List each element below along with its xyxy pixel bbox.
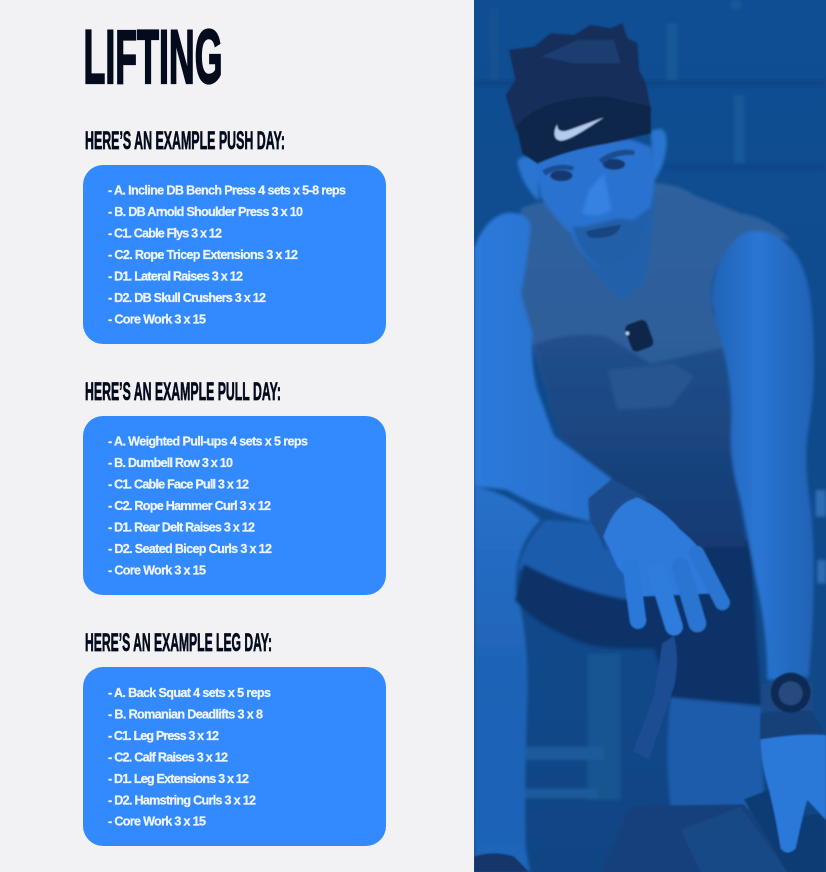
thigh bbox=[516, 520, 631, 603]
photo: athlete with blue duotone bbox=[474, 0, 826, 872]
microphone bbox=[624, 319, 655, 353]
shoe bbox=[474, 853, 529, 872]
card: pull day exercises: - Core Work 3 x 15 bbox=[108, 564, 206, 578]
strap bbox=[633, 636, 677, 759]
text: LIFTING bbox=[84, 15, 222, 100]
card: pull day exercises: - B. Dumbell Row 3 x 10 bbox=[108, 456, 233, 470]
neck bbox=[571, 193, 656, 300]
card: leg day exercises: - D1. Leg Extensions 3 x 12 bbox=[108, 772, 249, 786]
card: pull day exercises: - D1. Rear Delt Raises 3 x 12 bbox=[108, 520, 255, 534]
wrist strap bbox=[760, 709, 824, 739]
icon: headband swoosh bbox=[554, 117, 604, 141]
lower background bbox=[524, 490, 826, 800]
card: leg day exercises: - C1. Leg Press 3 x 12 bbox=[108, 729, 219, 743]
panel: pull day: HERE’S AN EXAMPLE PULL DAY: bbox=[85, 378, 281, 406]
card: pull day exercises bbox=[83, 416, 386, 595]
card: leg day exercises: - C2. Calf Raises 3 x 12 bbox=[108, 750, 228, 764]
hair bbox=[506, 23, 651, 133]
right ear bbox=[651, 129, 667, 182]
shorts bbox=[515, 540, 761, 706]
dumbbell bbox=[601, 789, 826, 872]
card: push day exercises: - D2. DB Skull Crushers 3 x 12 bbox=[108, 291, 266, 305]
gym wall bbox=[474, 0, 826, 170]
panel: pull day bbox=[83, 378, 386, 595]
torso shirt bbox=[521, 183, 791, 547]
card: push day exercises: - Core Work 3 x 15 bbox=[108, 312, 206, 326]
mouth bbox=[586, 225, 621, 238]
lower hand bbox=[761, 735, 826, 852]
card: leg day exercises: - B. Romanian Deadlifts 3 x 8 bbox=[108, 708, 263, 722]
headband bbox=[517, 96, 651, 163]
left arm bbox=[474, 213, 612, 522]
card: pull day exercises: - C1. Cable Face Pull 3 x 12 bbox=[108, 478, 249, 492]
card: leg day exercises: - D2. Hamstring Curls 3 x 12 bbox=[108, 794, 256, 808]
face bbox=[536, 139, 655, 267]
left ear bbox=[517, 156, 539, 202]
card: push day exercises: - C2. Rope Tricep Extensions 3 x 12 bbox=[108, 248, 298, 262]
card: pull day exercises: - C2. Rope Hammer Curl 3 x 12 bbox=[108, 499, 271, 513]
panel: push day: HERE’S AN EXAMPLE PUSH DAY: bbox=[85, 127, 285, 155]
left leg bbox=[474, 486, 541, 872]
wrist band bbox=[588, 479, 647, 553]
centre leg bbox=[667, 697, 764, 808]
card: push day exercises: - D1. Lateral Raises 3 x 12 bbox=[108, 270, 243, 284]
card: push day exercises: - B. DB Arnold Shoulder Press 3 x 10 bbox=[108, 205, 303, 219]
card: push day exercises: - C1. Cable Flys 3 x 12 bbox=[108, 226, 222, 240]
card: push day exercises bbox=[83, 165, 386, 344]
card: leg day exercises: - Core Work 3 x 15 bbox=[108, 814, 206, 828]
card: pull day exercises: - A. Weighted Pull-ups 4 sets x 5 reps bbox=[108, 434, 308, 448]
watch bbox=[761, 673, 813, 713]
right arm bbox=[711, 231, 814, 680]
hand bbox=[603, 498, 722, 627]
eyes and brows bbox=[542, 150, 635, 181]
card: push day exercises: - A. Incline DB Bench Press 4 sets x 5-8 reps bbox=[108, 184, 346, 198]
panel: leg day: HERE’S AN EXAMPLE LEG DAY: bbox=[85, 629, 272, 657]
card: leg day exercises bbox=[83, 667, 386, 846]
panel: leg day bbox=[83, 629, 386, 846]
panel: push day bbox=[83, 127, 386, 344]
card: leg day exercises: - A. Back Squat 4 sets x 5 reps bbox=[108, 686, 271, 700]
card: pull day exercises: - D2. Seated Bicep Curls 3 x 12 bbox=[108, 542, 272, 556]
